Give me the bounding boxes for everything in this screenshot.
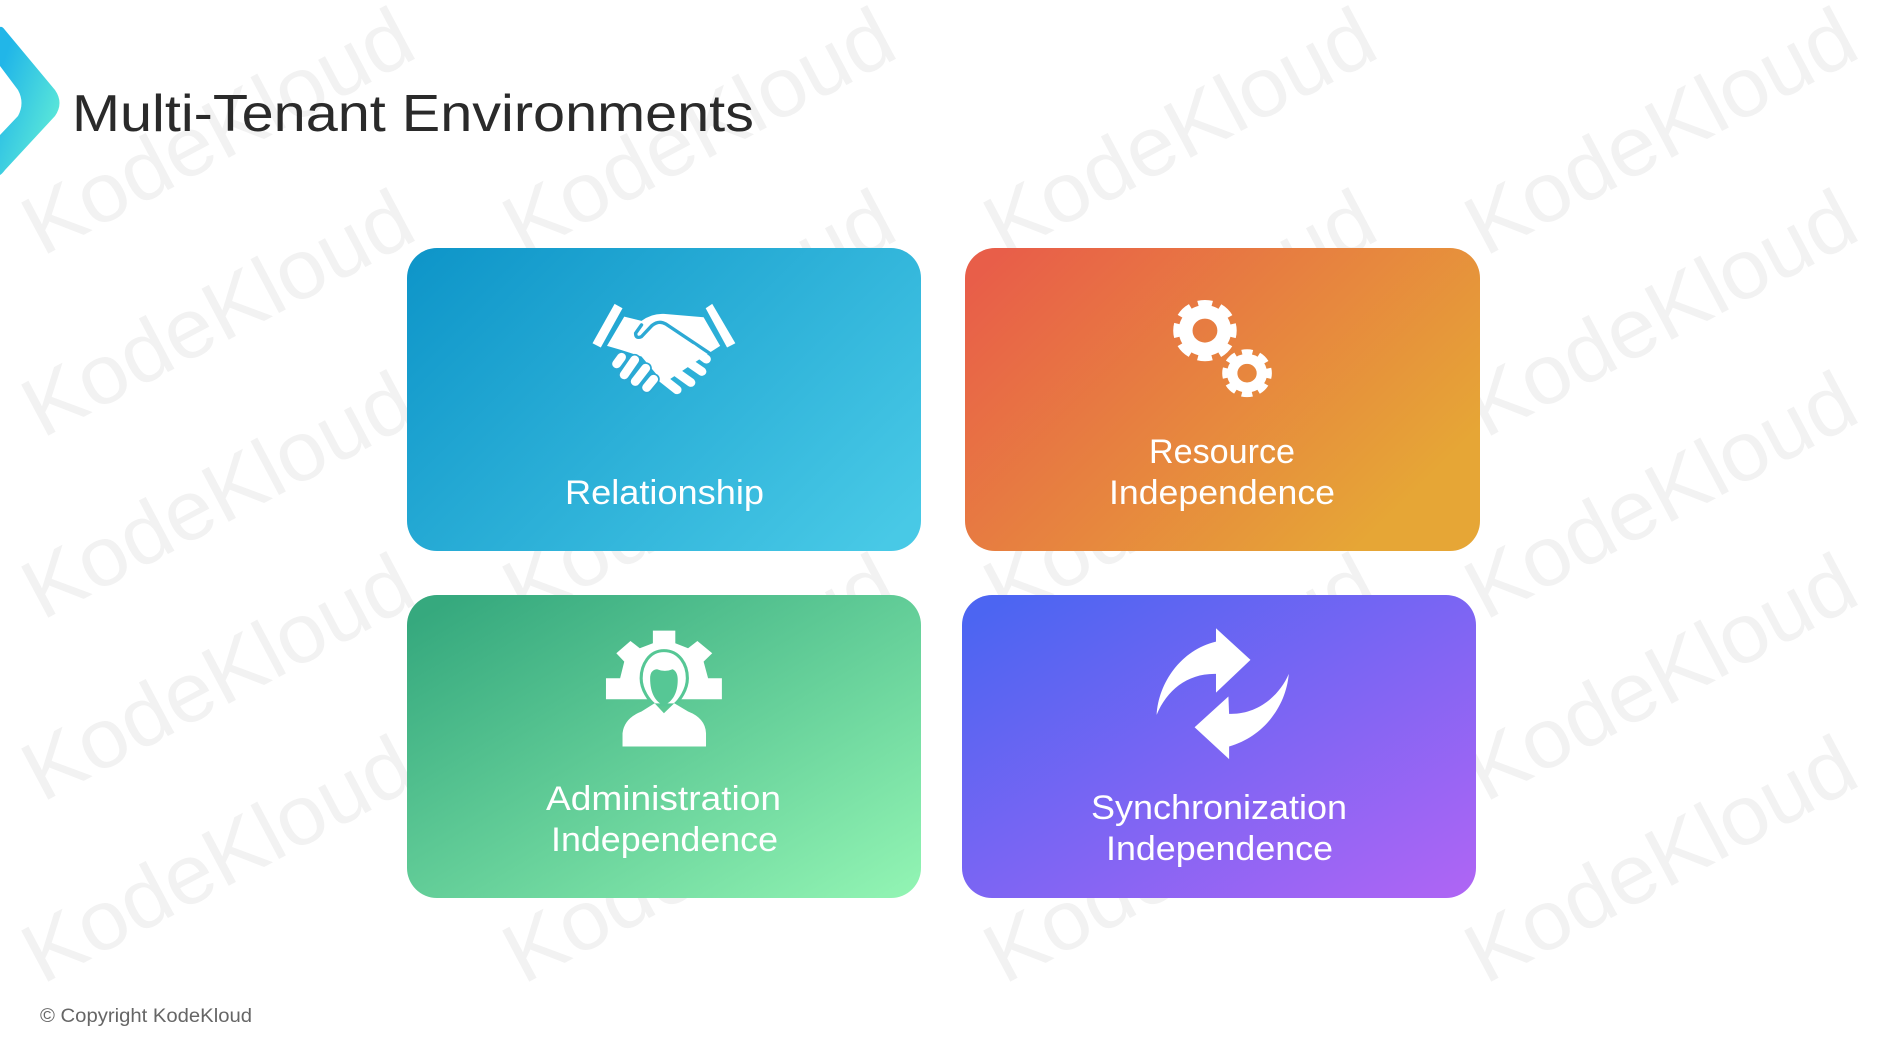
watermark pattern: KodeKloud (487, 717, 909, 1001)
watermark pattern: KodeKloud (1449, 0, 1871, 273)
card background: administration independence (407, 595, 921, 898)
watermark pattern: KodeKloud (968, 717, 1390, 1001)
panel: relationship (407, 248, 921, 551)
watermark pattern: KodeKloud (6, 353, 428, 637)
label: synchronization independence: Synchronization (1091, 789, 1347, 827)
icon: sync arrows (1157, 628, 1289, 759)
label: relationship: Relationship (565, 474, 764, 512)
label: administration independence: Independence (551, 821, 778, 859)
label: synchronization independence: Independence (1106, 830, 1333, 868)
watermark pattern: KodeKloud (6, 717, 428, 1001)
watermark pattern: KodeKloud (1449, 717, 1871, 1001)
label: resource independence: Independence (1109, 474, 1335, 512)
panel: resource independence (965, 248, 1480, 551)
panel: administration independence (407, 595, 921, 898)
title: Multi-Tenant Environments (72, 85, 754, 143)
watermark pattern: KodeKloud (6, 535, 428, 819)
label: administration independence (546, 780, 781, 859)
icon: gears (1177, 304, 1268, 394)
label: administration independence: Administration (546, 780, 781, 818)
watermark pattern: KodeKloud (968, 0, 1390, 273)
watermark pattern: KodeKloud (487, 171, 909, 455)
icon: person with gear (606, 631, 722, 747)
panel: synchronization independence (962, 595, 1476, 898)
watermark pattern: KodeKloud (968, 171, 1390, 455)
watermark pattern: KodeKloud (6, 0, 428, 273)
watermark pattern: KodeKloud (968, 353, 1390, 637)
watermark pattern: KodeKloud (487, 535, 909, 819)
copyright footer: © Copyright KodeKloud (40, 1006, 252, 1027)
watermark pattern: KodeKloud (1449, 171, 1871, 455)
label: resource independence: Resource (1149, 433, 1295, 471)
watermark pattern: KodeKloud (487, 0, 909, 273)
label: resource independence (1109, 433, 1335, 512)
watermark pattern: KodeKloud (1449, 535, 1871, 819)
card background: relationship (407, 248, 921, 551)
icon: handshake (593, 304, 735, 390)
card background: synchronization independence (962, 595, 1476, 898)
label: synchronization independence (1091, 789, 1347, 868)
watermark pattern: KodeKloud (968, 535, 1390, 819)
icon: logo chevron (0, 27, 60, 175)
watermark pattern: KodeKloud (6, 171, 428, 455)
watermark pattern: KodeKloud (1449, 353, 1871, 637)
card background: resource independence (965, 248, 1480, 551)
watermark pattern: KodeKloud (487, 353, 909, 637)
